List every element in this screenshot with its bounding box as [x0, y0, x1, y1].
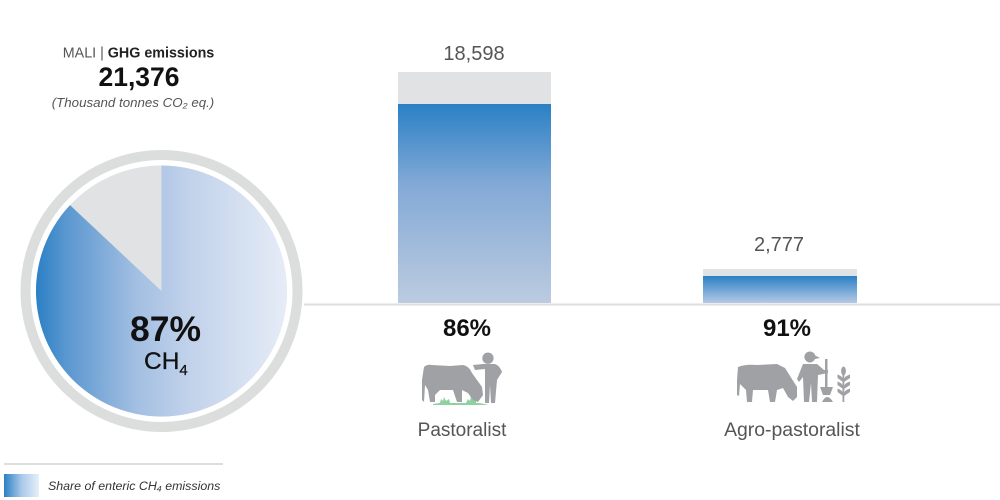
bar percent: 91% [763, 315, 811, 342]
heading label: MALI | GHG emissions [63, 46, 214, 62]
icon: pastoralist with cow [422, 352, 502, 405]
farmer [797, 351, 828, 402]
baseline axis [304, 304, 1000, 306]
grass [433, 396, 488, 405]
bar total [703, 269, 857, 276]
bar total [398, 72, 551, 104]
pie value: 87% [130, 309, 201, 349]
wheat stem [842, 375, 844, 402]
heading: Mali GHG emissions [52, 46, 214, 110]
legend swatch [4, 474, 39, 497]
bar enteric share [398, 104, 551, 303]
legend [4, 464, 223, 497]
cow [737, 364, 797, 402]
icon: agro-pastoralist with cow, farmer and wheat [737, 351, 850, 402]
bar value: 18,598 [443, 43, 505, 65]
bar: Agro-pastoralist [703, 234, 857, 342]
legend text: Share of enteric CH₄ emissions [48, 479, 220, 493]
cow [422, 365, 483, 402]
pie remainder [36, 166, 287, 416]
label: Agro-pastoralist: Agro-pastoralist [724, 419, 861, 441]
wheat top grain [841, 366, 846, 376]
shovel [820, 359, 833, 402]
bar value: 2,777 [754, 234, 804, 256]
legend rule [4, 463, 223, 465]
wheat leaves [838, 374, 850, 396]
bar: Pastoralist [398, 43, 551, 342]
herder [473, 352, 502, 403]
pie gas label: 4 [179, 362, 188, 379]
bar percent: 86% [443, 315, 491, 342]
pie share 87 percent [36, 166, 287, 416]
unit note: (Thousand tonnes CO₂ eq.) [52, 95, 214, 110]
label: Pastoralist: Pastoralist [418, 420, 507, 441]
donut-pie chart: CH4 share [26, 155, 298, 427]
outer ring [26, 155, 298, 427]
wheat [838, 366, 850, 402]
pie gas label: CH [144, 348, 179, 375]
total value: 21,376 [98, 62, 180, 92]
bar enteric share [703, 276, 857, 303]
